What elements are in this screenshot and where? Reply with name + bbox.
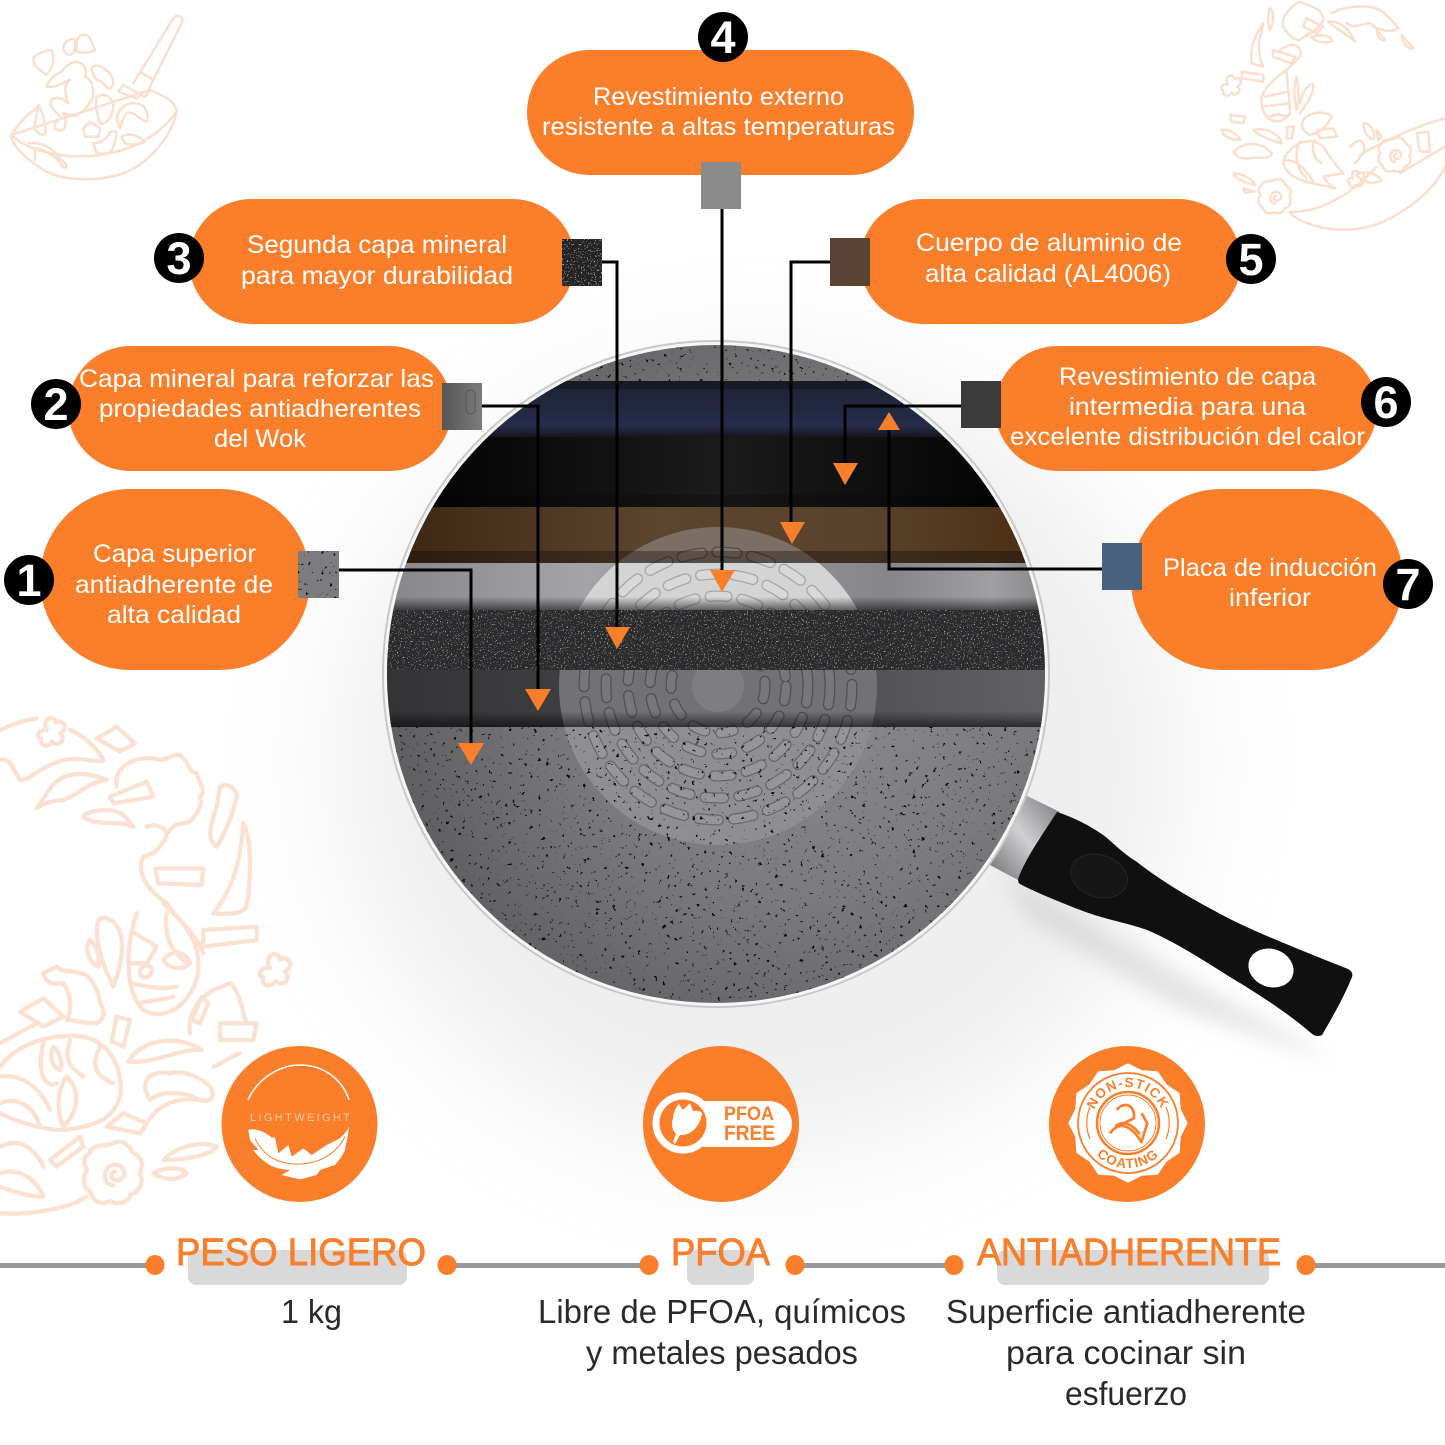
- induction disc: [564, 727, 872, 845]
- pill 7: induction plate: inferior: [1229, 584, 1311, 612]
- pill 1: top coating: antiadherente de: [75, 571, 273, 599]
- number badge 4: 4: [710, 12, 736, 63]
- leader line and arrow 6: [833, 406, 961, 485]
- wok body with layered cross-section: [380, 340, 1060, 1020]
- pill 3: second mineral layer: Segunda capa mineral: [247, 231, 507, 259]
- pill 2: mineral layer: Capa mineral para reforzar las: [79, 365, 434, 393]
- pill 4: external coating: Revestimiento externo: [593, 83, 844, 111]
- pill 6: intermediate layer: [995, 346, 1377, 471]
- swatch 4: [701, 162, 741, 209]
- number badge 6: [1361, 377, 1411, 428]
- text: weight: 1 kg: [281, 1293, 342, 1330]
- icon: PFOA free: FREE: [724, 1122, 775, 1145]
- swatch 3: [562, 239, 602, 286]
- pill 7: induction plate: Placa de inducción: [1163, 554, 1377, 582]
- heading: peso ligero: PESO LIGERO: [176, 1232, 426, 1274]
- leader line and arrow 4: [710, 209, 735, 592]
- number badge 1: 1: [16, 555, 42, 606]
- pill 4: external coating: resistente a altas temperaturas: [542, 113, 895, 141]
- swatch 1: [298, 551, 339, 598]
- pill 6: intermediate layer: intermedia para una: [1069, 393, 1306, 421]
- swatch 7: [1102, 543, 1142, 590]
- wok cooking surface: [380, 340, 1060, 1020]
- text: non-stick description: Superficie antiadherente: [946, 1293, 1306, 1330]
- number badge 7: [1383, 559, 1433, 610]
- decoration: wok line art, top left: [12, 16, 182, 179]
- layer: blue: [488, 381, 944, 437]
- heading: antiadherente: ANTIADHERENTE: [977, 1232, 1281, 1274]
- number badge 4: [698, 12, 748, 63]
- number badge 7: 7: [1395, 559, 1421, 610]
- pill 1: top coating: alta calidad: [107, 601, 241, 629]
- pill 1: top coating: Capa superior: [93, 540, 256, 568]
- text: pfoa description: Libre de PFOA, químicos: [538, 1293, 906, 1330]
- leader line and arrow 5: [780, 262, 830, 544]
- pill 2: mineral layer: propiedades antiadherentes: [99, 395, 421, 423]
- text: pfoa description: y metales pesados: [586, 1334, 858, 1371]
- icon: PFOA free: [643, 1046, 799, 1202]
- layer: brown aluminium: [406, 507, 1026, 563]
- pill 1: top coating: [40, 489, 310, 670]
- pill 4: external coating: [527, 50, 914, 175]
- leader line and arrow 7: [878, 412, 1102, 569]
- pill 6: intermediate layer: excelente distribución del calor: [1010, 423, 1365, 451]
- pill 2: mineral layer: [68, 346, 452, 471]
- pill 2: mineral layer: del Wok: [214, 425, 307, 453]
- decoration: food line art, left: [0, 718, 290, 1214]
- layer: black: [432, 437, 1000, 507]
- leader line and arrow 3: [602, 262, 630, 649]
- number badge 1: [4, 555, 54, 606]
- text: non-stick description: para cocinar sin: [1006, 1334, 1246, 1371]
- pill 5: aluminium body: [860, 199, 1241, 324]
- number badge 3: [154, 233, 204, 284]
- heading: pfoa: PFOA: [671, 1232, 771, 1274]
- decoration: food line art, top right: [1221, 2, 1445, 230]
- icon: lightweight feather: [222, 1046, 378, 1202]
- icon: non-stick coating seal: NON-STICK: [1086, 1078, 1169, 1109]
- number badge 3: 3: [166, 233, 192, 284]
- leader line and arrow 2: [482, 406, 551, 711]
- number badge 5: 5: [1238, 234, 1264, 285]
- text: non-stick description: esfuerzo: [1065, 1375, 1187, 1412]
- layer: mineral speckle: [380, 610, 1060, 670]
- swatch 6: [961, 381, 1001, 428]
- pill 5: aluminium body: Cuerpo de aluminio de: [916, 229, 1182, 257]
- pill 6: intermediate layer: Revestimiento de capa: [1059, 363, 1316, 391]
- wok handle: [990, 795, 1352, 1036]
- pill 7: induction plate: [1131, 489, 1403, 670]
- timeline divider: [0, 1255, 1445, 1275]
- layer: dark grey: [387, 670, 1045, 727]
- icon: PFOA free: PFOA: [724, 1104, 774, 1125]
- number badge 2: [31, 379, 81, 430]
- text: pfoa description: [538, 1293, 906, 1371]
- wok rim: [383, 341, 1049, 1007]
- number badge 5: [1226, 234, 1276, 285]
- icon: non-stick coating seal: COATING: [1098, 1150, 1158, 1168]
- swatch 5: [830, 238, 870, 286]
- swatch 2: [442, 383, 482, 430]
- icon: lightweight feather: LIGHTWEIGHT: [250, 1112, 350, 1124]
- text: non-stick description: [946, 1293, 1306, 1412]
- icon: non-stick coating seal: [1049, 1046, 1205, 1202]
- wok handle shadow: [1000, 870, 1330, 1060]
- pill 5: aluminium body: alta calidad (AL4006): [925, 260, 1171, 288]
- number badge 6: 6: [1373, 377, 1399, 428]
- layer: silver: [393, 563, 1039, 610]
- pill 3: second mineral layer: para mayor durabilidad: [241, 262, 513, 290]
- pill 3: second mineral layer: [189, 199, 575, 324]
- number badge 2: 2: [43, 379, 69, 430]
- leader line and arrow 1: [339, 570, 484, 765]
